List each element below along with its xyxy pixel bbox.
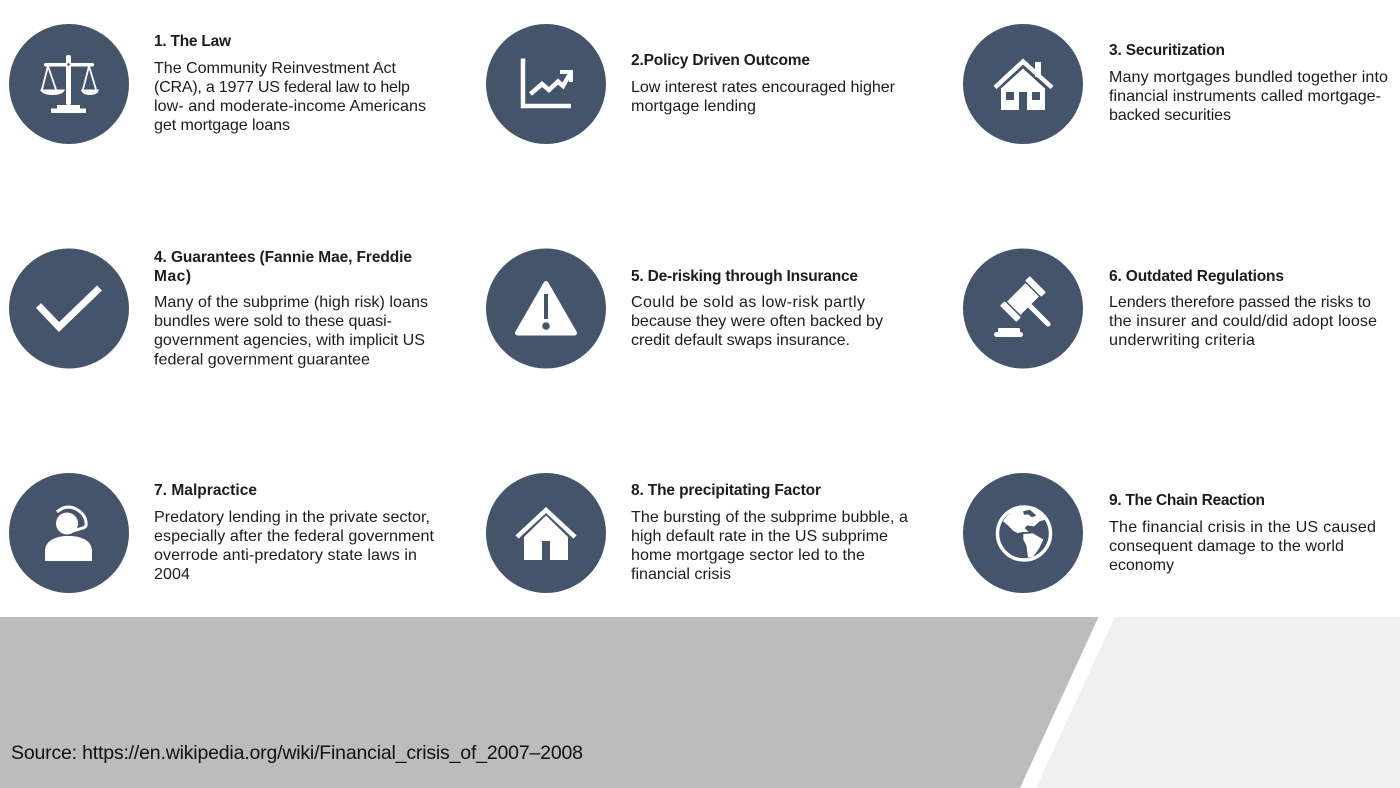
text: 1 The Law: 1. The Law [154, 33, 232, 50]
text: 2 Policy Driven Outcome [631, 52, 896, 115]
text: 4 Guarantees: bundles were sold to these quasi- [154, 312, 392, 330]
icon: gavel [963, 248, 1083, 368]
text: 1 The Law [154, 33, 426, 134]
panel: 2 Policy Driven Outcome [486, 24, 896, 144]
text: 8 The precipitating Factor: 8. The precipitating Factor [631, 482, 821, 499]
text: 4 Guarantees: Many of the subprime (high risk) loans [154, 293, 428, 311]
panel: 5 De-risking through Insurance [486, 248, 884, 368]
text: 5 De-risking through Insurance: credit default swaps insurance. [631, 331, 850, 349]
text: 8 The precipitating Factor: The bursting of the subprime bubble, a [631, 508, 908, 526]
icon: house with chimney [963, 24, 1083, 144]
text: 1 The Law: (CRA), a 1977 US federal law to help [154, 78, 410, 96]
text: 1 The Law: get mortgage loans [154, 116, 290, 134]
text: 1 The Law: low- and moderate-income Americans [154, 97, 426, 115]
text: 3 Securitization: financial instruments called mortgage- [1109, 87, 1381, 105]
text: 7 Malpractice: Predatory lending in the private sector, [154, 508, 430, 526]
text: 7 Malpractice: especially after the federal government [154, 527, 435, 545]
icon: warning triangle [486, 248, 606, 368]
text: 5 De-risking through Insurance [631, 268, 884, 349]
panel: 1 The Law [9, 24, 426, 144]
text: 4 Guarantees: 4. Guarantees (Fannie Mae, Freddie [154, 249, 412, 266]
panel: 7 Malpractice [9, 473, 435, 593]
icon: rising line chart [486, 24, 606, 144]
text: 3 Securitization: backed securities [1109, 106, 1231, 124]
text: 5 De-risking through Insurance: Could be sold as low-risk partly [631, 293, 866, 311]
text: 6 Outdated Regulations: 6. Outdated Regulations [1109, 268, 1284, 285]
text: 4 Guarantees: federal government guarantee [154, 350, 370, 368]
panel: 9 The Chain Reaction [963, 473, 1376, 593]
text: 9 The Chain Reaction: economy [1109, 556, 1175, 574]
icon: check mark [9, 248, 129, 368]
text: 6 Outdated Regulations: Lenders therefore passed the risks to [1109, 293, 1371, 311]
icon: globe [963, 473, 1083, 593]
icon: scales of justice [9, 24, 129, 144]
text: 4 Guarantees [154, 249, 428, 368]
footer band: grey panel [0, 617, 1098, 788]
text: 7 Malpractice: overrode anti-predatory state laws in [154, 546, 417, 564]
text: 3 Securitization: 3. Securitization [1109, 42, 1225, 59]
text: 8 The precipitating Factor: high default rate in the US subprime [631, 527, 888, 545]
text: 5 De-risking through Insurance: because they were often backed by [631, 312, 884, 330]
text: 7 Malpractice: 7. Malpractice [154, 482, 257, 499]
text: 9 The Chain Reaction: consequent damage to the world [1109, 537, 1344, 555]
text: 4 Guarantees: government agencies, with implicit US [154, 331, 425, 349]
text: 6 Outdated Regulations: underwriting criteria [1109, 331, 1255, 349]
text: 9 The Chain Reaction: The financial crisis in the US caused [1109, 518, 1376, 536]
text: 5 De-risking through Insurance: 5. De-risking through Insurance [631, 268, 858, 285]
text: 3 Securitization [1109, 42, 1388, 124]
footer band: light panel [1036, 617, 1400, 788]
panel: 3 Securitization [963, 24, 1388, 144]
text: 2 Policy Driven Outcome: Low interest rates encouraged higher [631, 78, 896, 96]
panel: 8 The precipitating Factor [486, 473, 908, 593]
text: 8 The precipitating Factor: home mortgage sector led to the [631, 546, 865, 564]
text: 9 The Chain Reaction: 9. The Chain Reaction [1109, 492, 1265, 509]
panel: 6 Outdated Regulations [963, 248, 1377, 368]
text: 2 Policy Driven Outcome: 2.Policy Driven Outcome [631, 52, 810, 69]
text: 2 Policy Driven Outcome: mortgage lending [631, 97, 756, 115]
text: 9 The Chain Reaction [1109, 492, 1376, 574]
text: 8 The precipitating Factor: financial crisis [631, 565, 731, 583]
text: 1 The Law: The Community Reinvestment Act [154, 59, 397, 77]
panel: 4 Guarantees [9, 248, 428, 368]
text: 7 Malpractice: 2004 [154, 565, 190, 583]
icon: person with headset [9, 473, 129, 593]
text: 8 The precipitating Factor [631, 482, 908, 583]
text: 6 Outdated Regulations [1109, 268, 1377, 349]
source line: Source: https://en.wikipedia.org/wiki/Financial_crisis_of_2007–2008 [11, 742, 583, 764]
text: 3 Securitization: Many mortgages bundled together into [1109, 68, 1388, 86]
icon: home [486, 473, 606, 593]
text: 7 Malpractice [154, 482, 435, 583]
text: 4 Guarantees: Mac) [154, 268, 191, 285]
text: 6 Outdated Regulations: the insurer and could/did adopt loose [1109, 312, 1377, 330]
